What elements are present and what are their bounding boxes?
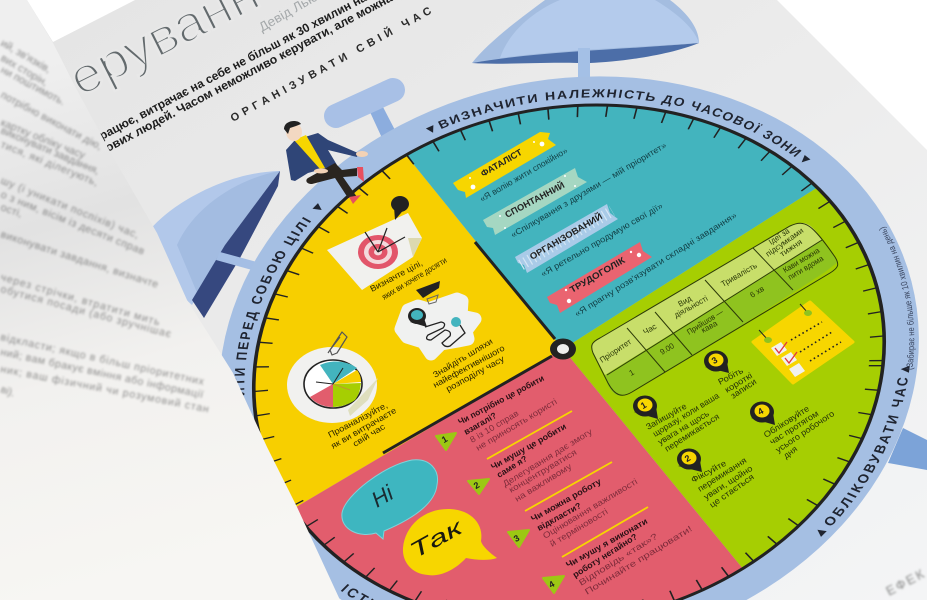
bubble: no [342,460,438,539]
left page blurred body text: ни поштимоть. [0,64,67,108]
question 3: відкласти? [535,500,583,533]
text: goals [368,255,449,302]
step 1: pin and text [633,390,721,454]
left page blurred body text: виконувати завдання, визначте [0,228,160,291]
left page blurred body text: потрібно виконати дію, [0,89,104,153]
sector: teal time zone [408,106,816,342]
text: analyse: Проаналізуйте, [326,400,389,440]
left page of the book [0,0,340,600]
tape: spontaneous [483,168,587,235]
table: time log: пити вдома [786,254,825,282]
table: time log: Прийшов — [685,307,725,337]
left page blurred body text: ий, зв'язків, [0,37,53,76]
table: time log: тижня [778,237,804,259]
icon: pie clock sticker [287,332,378,423]
illustration: man sitting on clock [284,121,368,204]
hub [550,338,576,360]
question 1 [436,373,559,453]
text: routes: Знайдіть шляхи [431,336,495,380]
table: time log: підсумками [764,226,805,259]
question separators [487,411,648,557]
tape: spontaneous: СПОНТАННИЙ [503,179,566,220]
clock outer ring [190,76,927,600]
table: time log: кава [700,319,719,335]
text: goals: яких ви хочете досягти [380,255,449,302]
question 4: Починайте працювати! [583,523,694,597]
step 4: pin and text [750,402,836,461]
icon: T handle [336,90,396,138]
step 2: pin and text: це стається [707,471,756,510]
bubble: yes: Так [405,513,469,563]
table: time log: діяльності [673,294,710,320]
left page blurred body text: обутися посади (або зручнішає [0,283,173,341]
icon: target sticker [327,196,422,290]
left page blurred body text [0,37,210,415]
table: time log [592,223,838,396]
text: routes: розподілу часу [444,353,507,394]
intro text: ових людей. Часом неможливо керувати, але можна [103,0,395,155]
question 3: Оцінювання важливості [541,476,639,541]
clock rim and ticks [227,105,911,600]
question 4: Чи мушу я виконати [564,516,649,570]
sector: green time log [570,188,882,568]
table: time log: Тривалість [720,261,759,289]
sector dividers [383,242,555,453]
step 2: pin and text [677,448,756,510]
bubble: yes [403,509,497,575]
question 3 [508,476,639,549]
icon: lower right bell stem [888,428,927,470]
table: time log: Вид [676,294,693,309]
table: time log: Кави можна [781,246,822,275]
step 3: pin and text: Робіть [716,365,745,387]
quote: organised: «Я ретельно продумую свої дії» [539,200,665,279]
step 3: pin and text: 3 [710,355,719,366]
step 4: pin and text: Обліковуйте [762,403,811,440]
left page blurred body text: тися, які ділегують, [0,139,100,189]
table: time log: Пріоритет [598,337,633,365]
text: goals: Визначте цілі, [368,258,424,294]
step 1: pin and text: щоразу, коли ваша [651,390,721,439]
left page blurred body text: шу (і уникати поспіхів) час, [0,175,141,241]
step 1: pin and text: Запишуйте [644,401,688,432]
text: routes: найефективнішого [431,343,507,390]
question 1: взагалі? [462,410,498,437]
step 1: pin and text: 1 [639,400,648,411]
tape: workaholic [547,242,652,313]
step 3: pin and text: короткі [723,370,754,395]
tape: fatalist [453,132,556,198]
left page blurred body text: виконувати завдання, [0,125,101,177]
question 1: не приносять користі [474,396,559,453]
left page blurred body text: ний; вам бракує вміння або інформації [0,346,204,401]
icon: checklist [753,302,853,383]
ring text: right: ▲ОБЛІКОВУВАТИ ЧАС▲ [817,366,910,537]
table: time log: 9.00 [658,341,676,357]
left page blurred body text: відкласти; якщо в більш пріоритетних [0,331,206,388]
icon: left bell [150,171,280,318]
quote: fatalist: «Я волію жити спокійно» [478,145,569,204]
quote: spontaneous: «Спілкування з друзями — мій пріоритет» [509,140,668,240]
subtitle: ОРГАНІЗУВАТИ СВІЙ ЧАС [228,4,434,125]
step 3: pin and text [704,350,758,401]
ring note: (Забирає не більше як 10 хвилин на день) [879,226,916,370]
table: time log: Ідеї за [767,226,792,247]
question 2: саме я? [495,453,529,480]
text: analyse: як ви витрачаєте [329,405,398,451]
question 4: Відповідь «так»? [577,531,660,588]
sector: yellow goals [256,156,556,507]
tape: organised: ОРГАНІЗОВАНИЙ [527,210,604,262]
step 2: pin and text: Фіксуйте [689,458,728,485]
question 2 [468,421,595,504]
question 4 [543,516,694,597]
tape: organised [515,204,618,273]
question 2: 2 [472,480,481,491]
next heading fragment, lower right: ЕФЕК [883,565,927,599]
tape: fatalist: ФАТАЛІСТ [479,147,524,179]
question 1: 8 із 10 справ [468,408,521,445]
sector: red priorities [296,355,742,600]
left page blurred body text: о з ним, вісім із десяти справ [0,189,147,258]
text: analyse: свій час [351,421,387,449]
question 2: на важливому [513,461,574,504]
question 1: Чи потрібно це робити [456,373,546,427]
clock sectors [256,106,882,600]
step 3: pin and text: записи [729,376,758,401]
question 2: концентруватися [507,447,579,495]
ring text: left: ПОСТАВИТИ ПЕРЕД СОБОЮ ЦІЛІ ▼ [234,203,322,396]
question 3: Чи можна роботу [529,476,603,524]
question 2: Чи мушу це робити [489,421,568,472]
question 2: Делегування дає змогу [501,426,595,489]
question 3: й терміновості [548,506,610,549]
step 4: pin and text: дня [781,443,800,461]
bubble: no: Ні [367,480,398,512]
step 2: pin and text: 2 [683,453,692,464]
left page blurred body text: через стрічки, втратити мить [0,271,162,329]
ring text: top: ▼ВИЗНАЧИТИ НАЛЕЖНІСТЬ ДО ЧАСОВОЇ ЗОНИ▼ [426,89,810,162]
left page blurred body text: ник; ваш фізичний чи розумовий стан [0,363,210,415]
table: time log: Час [642,322,658,337]
left page blurred body text: вих сторін, [0,52,50,89]
table: time log: 1 [628,367,636,378]
step 2: pin and text: перемикання [696,455,749,494]
table: time log: 6 хв [748,284,766,300]
left page blurred body text: картку обліку часу [0,117,88,162]
ring captions [234,89,916,600]
step 4: pin and text: 4 [756,406,765,417]
icon: route blob sticker [401,281,475,354]
question 4: 4 [547,579,556,590]
text: routes [431,336,507,394]
icon: right bell [472,0,699,80]
quote: workaholic: «Я прагну розв'язувати складні завдання» [573,210,739,319]
step 1: pin and text: перемикається [663,411,721,454]
step 1: pin and text: увага на щось [656,408,711,447]
step 2: pin and text: уваги, щойно [702,463,755,502]
question 1: 1 [440,434,449,445]
question 3: 3 [512,533,521,544]
step 4: pin and text: час протягом [768,408,820,447]
panel: time zone types [453,132,739,319]
step 4: pin and text: усього робочого [774,408,836,455]
question 4: роботу негайно? [571,531,639,580]
tape: workaholic: ТРУДОГОЛІК [568,255,627,295]
